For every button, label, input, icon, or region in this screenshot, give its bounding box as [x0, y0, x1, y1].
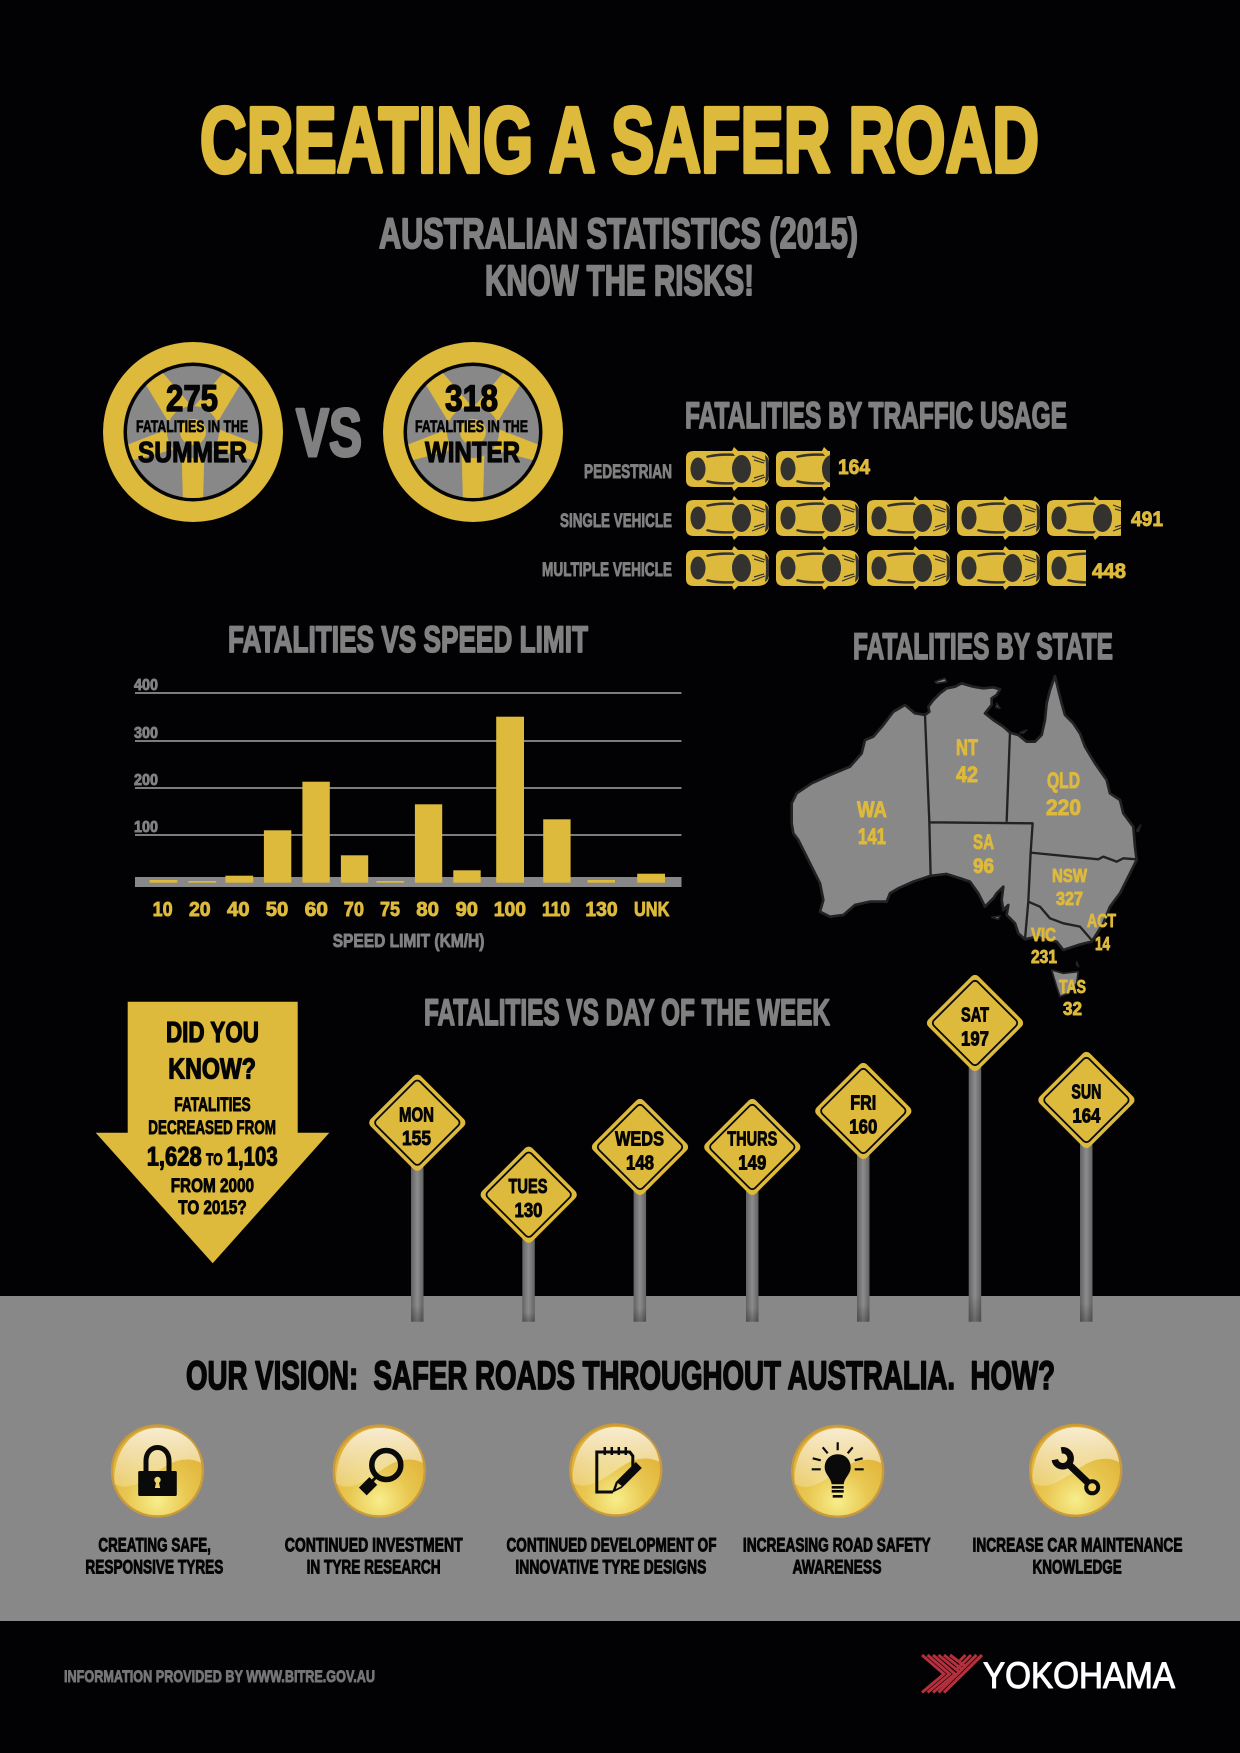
map: Australia by state — [792, 676, 1141, 1019]
winter steering wheel stat: FATALITIES IN THE — [415, 418, 528, 436]
state values: 96 — [973, 855, 994, 878]
item: car maintenance: KNOWLEDGE — [1032, 1557, 1122, 1578]
sign: thursday: 149 — [738, 1152, 766, 1174]
icon: wrench — [1030, 1425, 1121, 1516]
row: single vehicle — [560, 496, 1163, 540]
state values: NT — [956, 735, 978, 760]
sign: monday — [367, 1072, 468, 1322]
logo: Yokohama: YOKOHAMA — [983, 1655, 1175, 1696]
road band — [0, 1296, 1240, 1621]
x axis labels: 70 — [344, 898, 364, 921]
item: tyre designs — [506, 1424, 716, 1578]
y axis labels: 400 — [134, 677, 158, 694]
subtitle — [379, 210, 858, 305]
item: safe tyres: RESPONSIVE TYRES — [85, 1557, 223, 1578]
state values: ACT — [1087, 911, 1116, 931]
callout: did you know arrow: DID YOU — [166, 1017, 259, 1049]
row: multiple vehicle — [542, 546, 1130, 590]
sign: friday: FRI — [850, 1092, 876, 1114]
x axis title: SPEED LIMIT (KM/H) — [333, 931, 484, 951]
sign: thursday — [702, 1097, 803, 1322]
state values: VIC — [1031, 925, 1056, 945]
sign: tuesday: TUES — [508, 1176, 548, 1198]
summer steering wheel stat: 275 — [166, 378, 218, 419]
x axis labels: 10 — [153, 898, 173, 921]
sign: wednesday: WEDS — [615, 1128, 664, 1150]
winter steering wheel stat: WINTER — [425, 437, 520, 469]
summer steering wheel stat — [103, 342, 283, 522]
state values: 42 — [956, 762, 978, 787]
item: road safety awareness — [743, 1426, 931, 1578]
sign: monday: 155 — [402, 1128, 431, 1150]
callout: did you know arrow: FROM 2000 — [171, 1176, 254, 1197]
x axis labels: 40 — [227, 898, 250, 921]
logo: Yokohama — [922, 1655, 1175, 1696]
x axis labels: 80 — [416, 898, 439, 921]
heading: speed limit chart: FATALITIES VS SPEED LIMIT — [228, 618, 588, 660]
heading: fatalities by state: FATALITIES BY STATE — [853, 625, 1113, 667]
callout: did you know arrow: 1,103 — [227, 1141, 278, 1171]
sign: saturday: 197 — [961, 1028, 989, 1050]
sign: wednesday — [590, 1097, 690, 1322]
sign: saturday: SAT — [961, 1004, 989, 1026]
state values: 220 — [1046, 795, 1081, 820]
x axis labels — [153, 898, 670, 921]
callout: did you know arrow — [96, 1002, 329, 1263]
item: safe tyres: CREATING SAFE, — [98, 1535, 211, 1556]
callout: did you know arrow: TO 2015? — [178, 1198, 247, 1219]
callout: did you know arrow: TO — [206, 1150, 223, 1169]
state values: 327 — [1056, 889, 1083, 909]
item: tyre designs: CONTINUED DEVELOPMENT OF — [506, 1535, 716, 1556]
state values — [857, 735, 1116, 1019]
sign: tuesday: 130 — [514, 1200, 542, 1222]
winter steering wheel stat — [383, 342, 563, 522]
y axis labels: 300 — [134, 725, 158, 742]
subtitle: KNOW THE RISKS! — [485, 257, 754, 305]
sign: friday: 160 — [849, 1116, 877, 1138]
y axis labels: 100 — [134, 819, 158, 836]
icon: light bulb — [792, 1426, 883, 1517]
row: pedestrian: PEDESTRIAN — [584, 462, 672, 483]
row: multiple vehicle: MULTIPLE VEHICLE — [542, 560, 672, 581]
y axis labels — [134, 677, 158, 836]
icon: padlock — [112, 1426, 203, 1516]
state values: QLD — [1047, 768, 1080, 793]
x axis labels: 90 — [456, 898, 478, 921]
state values: 32 — [1063, 999, 1082, 1019]
chart: road signs by day of the week — [367, 973, 1137, 1322]
x axis labels: 60 — [305, 898, 328, 921]
y axis labels: 200 — [134, 772, 158, 789]
row: single vehicle: 491 — [1131, 507, 1163, 531]
sign: saturday — [925, 973, 1025, 1322]
item: road safety awareness: INCREASING ROAD SAFETY — [743, 1535, 931, 1556]
heading: day of the week: FATALITIES VS DAY OF THE WEEK — [424, 992, 830, 1033]
item: tyre research — [285, 1426, 463, 1578]
state values: SA — [973, 831, 994, 854]
state values: TAS — [1059, 977, 1086, 997]
sign: friday — [813, 1061, 914, 1322]
sign: thursday: THURS — [727, 1128, 777, 1150]
sign: tuesday — [478, 1144, 579, 1322]
sign: sunday: 164 — [1072, 1105, 1101, 1127]
summer steering wheel stat: FATALITIES IN THE — [136, 418, 248, 436]
winter steering wheel stat: 318 — [445, 378, 498, 419]
subtitle: AUSTRALIAN STATISTICS (2015) — [379, 210, 858, 258]
row: pedestrian: 164 — [838, 455, 870, 479]
callout: did you know arrow: 1,628 — [147, 1141, 202, 1171]
x axis labels: 130 — [585, 898, 618, 921]
sign: sunday — [1036, 1050, 1137, 1322]
callout: did you know arrow: FATALITIES — [174, 1095, 251, 1116]
source note: INFORMATION PROVIDED BY WWW.BITRE.GOV.AU — [64, 1667, 375, 1686]
x axis labels: 75 — [380, 898, 400, 921]
item: tyre designs: INNOVATIVE TYRE DESIGNS — [515, 1557, 706, 1578]
item: tyre research: CONTINUED INVESTMENT — [285, 1535, 463, 1556]
row: single vehicle: SINGLE VEHICLE — [560, 511, 672, 532]
row: multiple vehicle: 448 — [1092, 559, 1126, 583]
item: safe tyres — [85, 1426, 223, 1578]
x axis labels: 100 — [494, 898, 526, 921]
sign: monday: MON — [399, 1104, 434, 1126]
panel: fatalities by traffic usage — [542, 394, 1163, 590]
state values: NSW — [1052, 866, 1087, 886]
bar chart: fatalities vs speed limit — [134, 677, 682, 951]
x axis labels: UNK — [634, 898, 670, 921]
versus label: VS — [296, 395, 362, 471]
sign: sunday: SUN — [1071, 1081, 1101, 1103]
x axis labels: 50 — [266, 898, 288, 921]
state values: 14 — [1095, 934, 1110, 954]
summer steering wheel stat: SUMMER — [138, 437, 247, 469]
icon: notepad and pencil — [570, 1424, 661, 1516]
state values: 141 — [858, 824, 886, 849]
callout: did you know arrow: KNOW? — [168, 1053, 256, 1085]
x axis labels: 110 — [542, 898, 570, 921]
sign: wednesday: 148 — [626, 1152, 654, 1174]
item: tyre research: IN TYRE RESEARCH — [307, 1557, 441, 1578]
callout: did you know arrow: DECREASED FROM — [148, 1118, 276, 1139]
state values: WA — [857, 797, 887, 822]
row: pedestrian — [584, 447, 870, 491]
state values: 231 — [1031, 947, 1057, 967]
item: road safety awareness: AWARENESS — [792, 1557, 882, 1578]
icon: magnifying glass — [334, 1426, 425, 1516]
item: car maintenance — [972, 1425, 1182, 1578]
x axis labels: 20 — [189, 898, 211, 921]
